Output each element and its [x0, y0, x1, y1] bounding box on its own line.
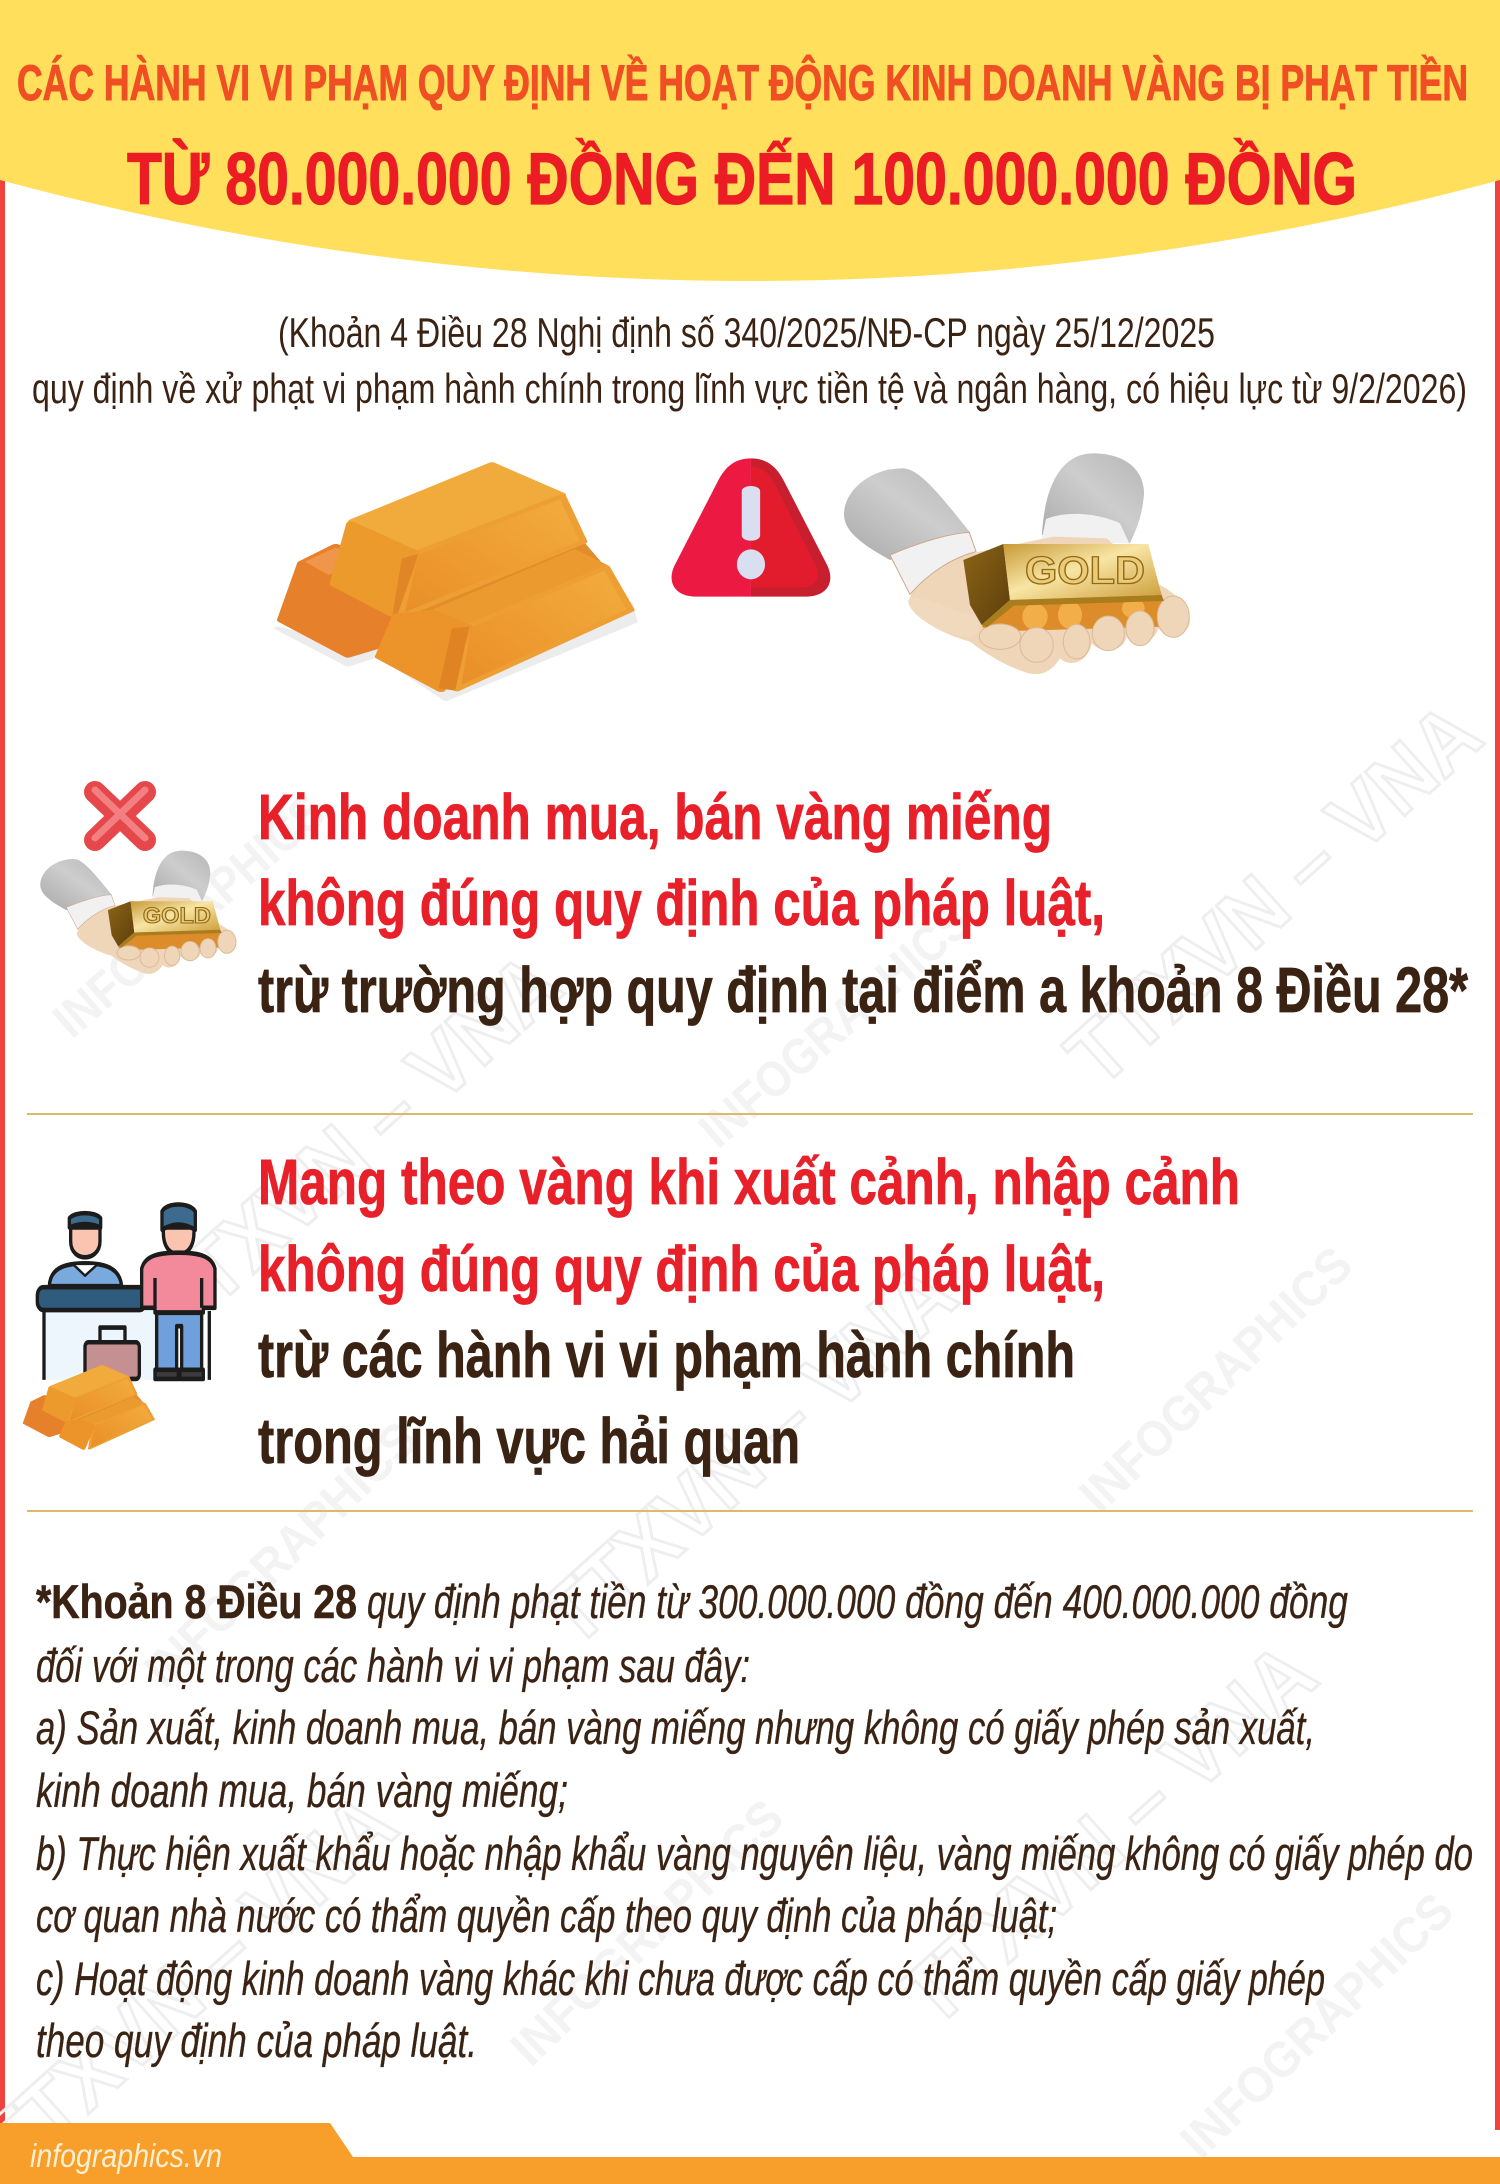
watermarks: INFOGRAPHICS: [688, 893, 982, 1158]
legal reference: (Khoản 4 Điều 28 Nghị định số 340/2025/NĐ-CP ngày 25/12/2025: [278, 309, 1215, 356]
footnote: *Khoản 8 Điều 28: [36, 1575, 357, 1628]
watermarks: [0, 685, 1499, 2184]
footnote: cơ quan nhà nước có thẩm quyền cấp theo quy định của pháp luật;: [36, 1889, 1057, 1942]
item 1: [40, 781, 1468, 1026]
header banner: [0, 0, 1500, 281]
icon: small gold bars: [25, 1366, 154, 1449]
icon: red cross: [95, 790, 145, 840]
watermarks: INFOGRAPHICS: [42, 783, 336, 1048]
footnote: [36, 1575, 1473, 2067]
icon: small hand with gold: GOLD: [143, 903, 211, 928]
item 2 text: không đúng quy định của pháp luật,: [258, 1233, 1105, 1305]
item 1 text: [258, 781, 1468, 1026]
item 2 text: [258, 1146, 1240, 1477]
divider: [27, 1510, 1473, 1512]
footer source: infographics.vn: [30, 2137, 222, 2174]
divider: [27, 1113, 1473, 1115]
item 1 text: Kinh doanh mua, bán vàng miếng: [258, 781, 1052, 853]
item 1 text: không đúng quy định của pháp luật,: [258, 867, 1105, 939]
item 2: [25, 1146, 1240, 1477]
watermarks: TTXVN – VNA: [883, 1625, 1334, 2044]
watermarks: INFOGRAPHICS: [500, 1789, 794, 2076]
icon: warning triangle: [672, 458, 830, 597]
footnote: theo quy định của pháp luật.: [36, 2014, 477, 2067]
watermarks: TTXVN – VNA: [523, 1245, 974, 1664]
item 2 text: Mang theo vàng khi xuất cảnh, nhập cảnh: [258, 1146, 1240, 1218]
watermarks: INFOGRAPHICS: [1170, 1882, 1464, 2169]
watermarks: INFOGRAPHICS: [1069, 1236, 1363, 1523]
icon: border control with gold: [37, 1205, 215, 1380]
footer bar: [0, 2123, 1500, 2184]
legal reference: [32, 309, 1467, 412]
icon: hand holding gold: GOLD: [1025, 548, 1145, 592]
footnote: kinh doanh mua, bán vàng miếng;: [36, 1764, 568, 1817]
watermarks: TTXVN – VNA: [128, 935, 579, 1354]
footnote: đối với một trong các hành vi vi phạm sau đây:: [36, 1639, 750, 1692]
icon: gold bars: [278, 465, 635, 699]
item 2 text: trừ các hành vi vi phạm hành chính: [258, 1319, 1075, 1391]
icon: hand holding gold: [844, 453, 1190, 674]
watermarks: INFOGRAPHICS: [134, 1411, 428, 1698]
item 2 text: trong lĩnh vực hải quan: [258, 1405, 800, 1477]
icon: small hand with gold: [40, 851, 236, 974]
